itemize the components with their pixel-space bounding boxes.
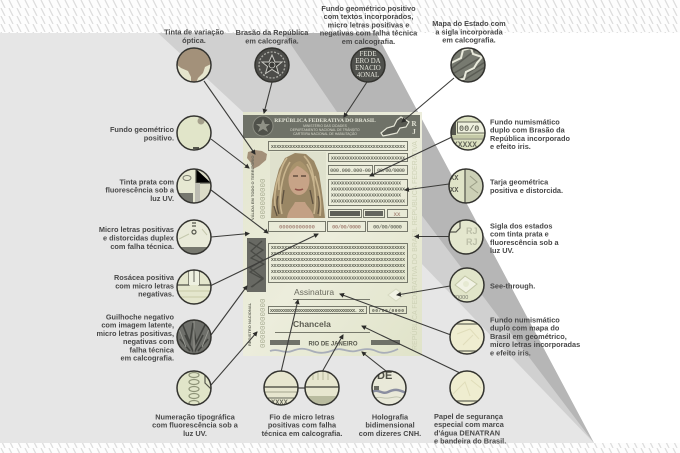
signature: Assinatura bbox=[294, 287, 334, 297]
label: security paper: Papel de segurança bbox=[434, 412, 503, 421]
vertical label strip: VÁLIDA EM TODO O TERRITÓRIO bbox=[250, 156, 255, 220]
label: numismatic map background: Brasil em geométrico, bbox=[490, 332, 567, 341]
label: numbering: luz UV. bbox=[183, 429, 207, 438]
label: geometric background with texts: negativas com falha técnica bbox=[320, 29, 418, 38]
label: coat of arms: em calcografia. bbox=[245, 36, 299, 45]
icon: lens micro text background: FEDE bbox=[360, 51, 376, 58]
card header: CARTEIRA NACIONAL DE HABILITAÇÃO bbox=[293, 131, 357, 136]
icon: lens optical ink map bbox=[176, 48, 211, 86]
observations grid: XXXXXXXXXXXXXXXXXXXXXXXXXXXXXXXXXXXXXXXXXXXXXXXXXX bbox=[271, 251, 405, 257]
arrow: numbering bbox=[211, 332, 257, 385]
long number field: XXXXXXXXXXXXXXXXXXXXXXXXXXXXXXXXXXXXXX. XX bbox=[270, 308, 364, 314]
label: state initials: luz UV. bbox=[490, 246, 514, 255]
label: geometric stripe: Tarja geométrica bbox=[490, 178, 548, 186]
observations grid: XXXXXXXXXXXXXXXXXXXXXXXXXXXXXXXXXXXXXXXXXXXXXXXXXX bbox=[271, 257, 405, 263]
icon: lens micro text background bbox=[351, 48, 385, 82]
card header bbox=[243, 115, 420, 138]
icon: lens see-through bbox=[450, 268, 484, 302]
background: grey light field bbox=[0, 33, 594, 443]
label: micro letters: Micro letras positivas bbox=[99, 225, 174, 234]
label: security paper: especial com marca bbox=[434, 420, 505, 429]
card header: REPÚBLICA FEDERATIVA DO BRASIL bbox=[274, 116, 376, 124]
label: numismatic map background: micro letras incorporadas bbox=[490, 340, 580, 349]
hologram strip bbox=[270, 349, 398, 353]
arrow: geometric stripe bbox=[405, 184, 449, 190]
filiation field: XXXXXXXXXXXXXXXXXXXXXXXXXX bbox=[331, 180, 401, 186]
label: holography: Holografia bbox=[372, 412, 408, 422]
icon: lens numbering bbox=[177, 371, 211, 406]
arrow: see-through bbox=[397, 286, 450, 295]
icon: lens geometric stripe bbox=[449, 169, 483, 203]
background: hatched top band bbox=[0, 0, 680, 33]
label: geometric background: Fundo geométrico bbox=[110, 125, 174, 134]
icon: lens state initials: RJ bbox=[466, 237, 478, 247]
label: rosette: negativas. bbox=[138, 290, 174, 299]
arrow: geometric background bbox=[211, 139, 249, 168]
label: rosette: com micro letras bbox=[115, 281, 174, 290]
label: micro letter thread: Fio de micro letras bbox=[269, 412, 335, 422]
label: geometric background with texts: Fundo geométrico positivo bbox=[321, 4, 416, 13]
arrow: optical ink bbox=[204, 81, 255, 154]
card header: DEPARTAMENTO NACIONAL DE TRÂNSITO bbox=[290, 128, 360, 132]
icon: lens micro letters bbox=[177, 220, 211, 254]
arrow: micro letter thread one bbox=[281, 300, 298, 372]
long number field bbox=[268, 306, 406, 314]
label: micro letters: e distorcidas duplex bbox=[103, 233, 175, 242]
icon: lens micro text background: ENACIO bbox=[355, 65, 381, 72]
icon: lens coat of arms bbox=[255, 48, 289, 82]
label: guilloche: falha técnica bbox=[130, 345, 175, 354]
label: geometric background with texts: micro letras positivas e bbox=[328, 20, 409, 29]
label: geometric background with texts: em calcografia. bbox=[342, 37, 395, 46]
birth date field: 00/00/0000 bbox=[377, 167, 406, 174]
vertical number lower: 00000000000 bbox=[260, 298, 268, 348]
arrow: silver ink bbox=[211, 190, 268, 233]
arrow: micro letters bbox=[211, 234, 249, 237]
label: see-through: See-through. bbox=[490, 282, 535, 290]
label: state map: Mapa do Estado com bbox=[432, 19, 506, 28]
issuing state bbox=[270, 340, 400, 348]
label: numbering: com fluorescência sob a bbox=[152, 421, 239, 430]
arrow: rosette bbox=[210, 234, 318, 286]
label: rosette: Rosácea positiva bbox=[114, 273, 174, 282]
label: state map: em calcografia. bbox=[442, 36, 496, 45]
background: hatched bottom band bbox=[0, 443, 680, 453]
guilloche block bbox=[247, 238, 266, 292]
name field: XXXXXXXXXXXXXXXXXXXXXXXXXXXXXXXXXXXXXXXXXXXXXXXXXX bbox=[271, 144, 405, 150]
arrow: coat of arms bbox=[264, 82, 272, 113]
filiation field: XXXXXXXXXXXXXXXXXXXXXXXXXXXX bbox=[331, 198, 405, 204]
label: state initials: com tinta prata e bbox=[490, 230, 549, 239]
card right edge pattern: REPÚBLICA FEDERATIVA DO BRASIL REPÚBLICA FEDERATIVA bbox=[410, 141, 419, 350]
label: micro letter thread: técnica em calcografia. bbox=[262, 429, 342, 438]
observations grid: XXXXXXXXXXXXXXXXXXXXXXXXXXXXXXXXXXXXXXXXXXXXXXXXXX bbox=[271, 245, 405, 251]
icon: lens state map bbox=[451, 48, 485, 82]
label: geometric stripe: positiva e distorcida. bbox=[490, 186, 563, 195]
icon: lens geometric stripe: XX bbox=[450, 187, 459, 195]
cpf field: 000.000.000-00 bbox=[330, 167, 372, 174]
observations grid: XXXXXXXXXXXXXXXXXXXXXXXXXXXXXXXXXXXXXXXXXXXXXXXXXX bbox=[271, 263, 405, 269]
registration and date fields: 00/00/0000 bbox=[332, 224, 362, 230]
issuing state: RIO DE JANEIRO bbox=[308, 342, 358, 348]
icon: lens state initials: RJ bbox=[466, 226, 478, 236]
label: holography: bidimensional bbox=[365, 421, 415, 430]
observations grid: XXXXXXXXXXXXXXXXXXXXXXXXXXXXXXXXXXXXXXXXXXXXXXXXXX bbox=[271, 276, 405, 282]
label: state initials: Sigla dos estados bbox=[490, 222, 552, 230]
icon: lens micro text background: 4ONAL bbox=[357, 72, 379, 79]
icon: lens numismatic arms: 00/0 bbox=[459, 124, 479, 134]
card header: R bbox=[411, 120, 417, 128]
name field bbox=[268, 142, 408, 150]
signature bbox=[293, 287, 370, 300]
label: numismatic map background: e efeito iris. bbox=[490, 348, 531, 357]
small category fields bbox=[328, 210, 408, 218]
icon: lens see-through: 00000 bbox=[453, 295, 468, 301]
icon: lens numismatic arms: XXXXX bbox=[453, 141, 477, 150]
label: numismatic arms background: Fundo numismático bbox=[490, 118, 560, 126]
label: numismatic map background: Fundo numismático bbox=[490, 316, 560, 324]
label: optical ink: Tinta de variação bbox=[164, 28, 224, 36]
see-through mark bbox=[388, 289, 404, 301]
label: guilloche: em calcografia. bbox=[121, 354, 174, 362]
label: security paper: e bandeira do Brasil. bbox=[434, 437, 506, 446]
label: numismatic map background: duplo com mapa do bbox=[490, 324, 560, 333]
arrow: numismatic map background bbox=[340, 294, 451, 335]
optical ink map bbox=[247, 150, 267, 169]
label: micro letter thread: positivas com falha bbox=[268, 421, 337, 430]
label: numismatic arms background: República incorporado bbox=[490, 134, 570, 143]
icon: lens rosette bbox=[177, 270, 211, 304]
label: state map: a sigla incorporada bbox=[435, 27, 504, 36]
icon: lens holography: DE bbox=[377, 370, 392, 382]
panel: licence card bbox=[243, 112, 422, 356]
label: silver ink: Tinta prata com bbox=[119, 178, 174, 186]
long number field: 00/00/0000 bbox=[372, 308, 404, 314]
icon: lens thread one: XXXX bbox=[271, 400, 289, 408]
background: light beam bbox=[158, 33, 594, 443]
icon: lens numismatic map bbox=[450, 320, 484, 354]
registration and date fields: 00000000000 bbox=[279, 224, 316, 230]
label: geometric background: positivo. bbox=[144, 134, 174, 142]
icon: lens security paper bbox=[450, 371, 484, 405]
icon: lens thread two bbox=[305, 371, 339, 405]
filiation field bbox=[328, 180, 408, 206]
card header: J bbox=[412, 128, 416, 136]
label: optical ink: óptica. bbox=[182, 36, 206, 45]
background: dark beam bbox=[283, 33, 594, 443]
label: guilloche: micro letras positivas, bbox=[96, 329, 174, 338]
arrow: state initials bbox=[415, 236, 449, 238]
vertical label lower: REGISTRO NACIONAL bbox=[247, 302, 252, 346]
registration and date fields: 00/00/0000 bbox=[373, 224, 403, 230]
label: silver ink: luz UV. bbox=[150, 194, 174, 203]
label: numbering: Numeração tipográfica bbox=[155, 412, 235, 422]
arrow: numismatic arms background bbox=[370, 137, 452, 176]
seal text: Chancela bbox=[293, 319, 331, 329]
label: holography: com dizeres CNH. bbox=[359, 429, 421, 438]
icon: lens silver ink bbox=[177, 169, 211, 203]
arrow: state map bbox=[402, 78, 454, 122]
arrow: guilloche bbox=[211, 286, 247, 335]
label: guilloche: com imagem latente, bbox=[101, 321, 174, 330]
label: geometric background with texts: com textos incorporados, bbox=[324, 12, 413, 21]
label: guilloche: negativas com bbox=[123, 337, 174, 346]
label: silver ink: fluorescência sob a bbox=[105, 186, 175, 195]
seal text bbox=[275, 319, 370, 332]
label: coat of arms: Brasão da República bbox=[236, 28, 308, 37]
vertical number: 000000000 bbox=[260, 178, 268, 219]
filiation field: XXXXXXXXXXXXXXXXXXXXXXXXXXXX bbox=[331, 186, 405, 192]
document field: XXXXXXXXXXXXXXXXXXXXXXXXXXXX bbox=[331, 156, 405, 162]
label: state initials: fluorescência sob a bbox=[490, 238, 559, 247]
birth date field bbox=[374, 166, 408, 174]
document field bbox=[328, 154, 408, 162]
small category fields: XX bbox=[394, 211, 401, 218]
registration and date fields bbox=[268, 222, 408, 232]
icon: lens numismatic arms bbox=[451, 116, 488, 150]
icon: lens geometric background bbox=[177, 116, 211, 150]
label: micro letters: com falha técnica. bbox=[110, 242, 174, 251]
arrow: geometric background with texts bbox=[344, 82, 367, 117]
label: numismatic arms background: e efeito iris. bbox=[490, 142, 531, 151]
icon: lens holography bbox=[372, 370, 406, 405]
connector between thread lenses bbox=[298, 387, 305, 389]
icon: lens micro text background: ERO DA bbox=[355, 58, 381, 65]
arrow: holography bbox=[362, 352, 386, 371]
icon: lens thread one bbox=[264, 371, 298, 408]
icon: lens guilloche bbox=[177, 320, 211, 354]
filiation field: XXXXXXXXXXXXXXXXXXXXXXXXXX bbox=[331, 192, 401, 198]
icon: lens state initials bbox=[449, 220, 483, 254]
observations grid: XXXXXXXXXXXXXXXXXXXXXXXXXXXXXXXXXXXXXXXXXXXXXXXXXX bbox=[271, 269, 405, 275]
holder photo bbox=[270, 152, 326, 218]
card header: MINISTÉRIO DAS CIDADES bbox=[303, 123, 348, 128]
label: numismatic arms background: duplo com Brasão da bbox=[490, 126, 566, 135]
observations grid bbox=[268, 244, 408, 282]
arrow: security paper bbox=[362, 326, 460, 373]
arrow: micro letter thread two bbox=[322, 335, 343, 372]
label: security paper: d'água DENATRAN bbox=[434, 428, 500, 437]
label: guilloche: Guilhoche negativo bbox=[106, 312, 174, 322]
icon: lens geometric stripe: XX bbox=[450, 175, 459, 183]
